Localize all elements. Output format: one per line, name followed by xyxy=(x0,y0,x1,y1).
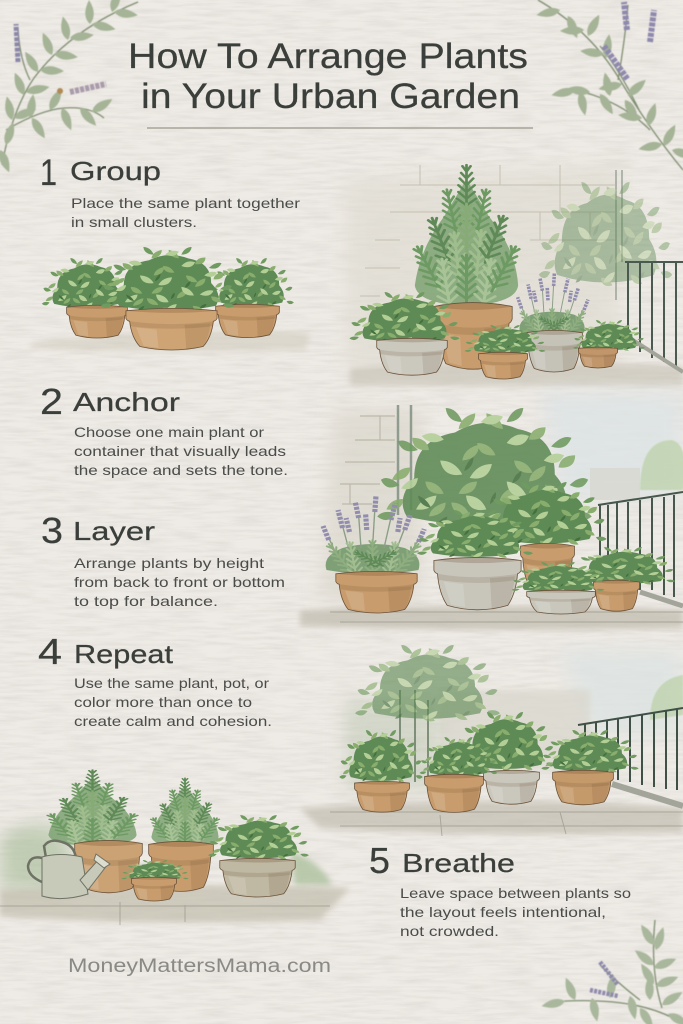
step 5: breathe: not crowded. xyxy=(400,923,499,939)
step 1: group: Place the same plant together xyxy=(71,195,300,211)
step 4: repeat xyxy=(38,631,272,729)
website credit: MoneyMattersMama.com xyxy=(68,956,331,977)
decorative sprig: top left xyxy=(0,0,138,174)
illustration: repeated pots on terrace xyxy=(300,645,683,836)
illustration: anchor terrace with tall plant xyxy=(345,165,683,386)
step 4: repeat: Use the same plant, pot, or xyxy=(74,675,269,691)
decorative sprig: top right xyxy=(536,0,683,170)
step 5: breathe: the layout feels intentional, xyxy=(400,904,606,920)
step 3: layer: from back to front or bottom xyxy=(74,574,285,590)
step 1: group: in small clusters. xyxy=(71,214,197,230)
title xyxy=(128,37,528,116)
title: in Your Urban Garden xyxy=(141,77,520,116)
step 2: anchor: the space and sets the tone. xyxy=(74,462,288,478)
step 5: breathe: Leave space between plants so xyxy=(400,885,631,901)
step 2: anchor xyxy=(40,381,288,478)
step 3: layer: Layer xyxy=(73,516,155,546)
illustration: three matching pots xyxy=(30,247,310,352)
step 4: repeat: Repeat xyxy=(74,639,174,669)
icon: watering can xyxy=(28,841,110,899)
step 2: anchor: Choose one main plant or xyxy=(74,424,264,440)
decorative sprig: bottom right xyxy=(541,920,683,1024)
step 3: layer: Arrange plants by height xyxy=(74,555,264,571)
step 2: anchor: 2 xyxy=(40,381,63,422)
step 5: breathe: 5 xyxy=(369,840,390,881)
step 4: repeat: create calm and cohesion. xyxy=(74,713,272,729)
step 2: anchor: container that visually leads xyxy=(74,443,286,459)
step 1: group: Group xyxy=(70,156,161,186)
step 5: breathe xyxy=(369,840,631,939)
step 4: repeat: 4 xyxy=(38,631,62,672)
step 3: layer xyxy=(41,510,285,609)
step 3: layer: to top for balance. xyxy=(74,593,218,609)
step 1: group: 1 xyxy=(40,152,57,193)
title: How To Arrange Plants xyxy=(128,37,528,76)
illustration: layered terrace xyxy=(300,392,683,630)
step 4: repeat: color more than once to xyxy=(74,694,252,710)
step 1: group xyxy=(40,152,300,230)
step 2: anchor: Anchor xyxy=(73,387,180,417)
illustration: corner herbs with watering can xyxy=(0,770,350,925)
step 5: breathe: Breathe xyxy=(402,848,515,878)
step 3: layer: 3 xyxy=(41,510,63,551)
